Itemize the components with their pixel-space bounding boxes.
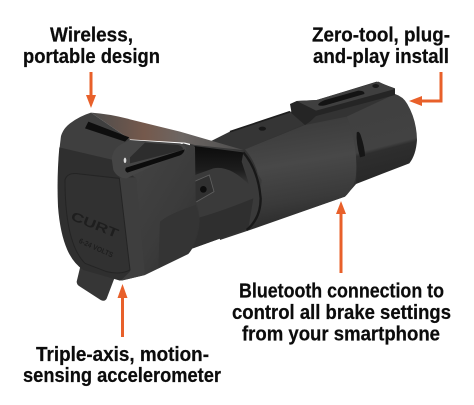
roof wedge [91,113,243,150]
hinge glint [124,158,126,163]
inner face outline [65,173,130,273]
arrow: zero-tool install [409,72,442,106]
latch tab [77,265,115,301]
label: triple-axis accelerometer: Triple-axis, motion- [36,343,209,366]
neck lower shading [190,198,253,249]
hinge slot [130,143,183,163]
label: bluetooth connection: from your smartphone [242,322,440,346]
arrow: accelerometer [118,284,128,337]
rear tube section [207,94,395,240]
neck opening [194,146,249,185]
neck body [190,140,262,249]
label: bluetooth connection: control all brake settings [232,301,451,324]
screw [259,127,266,131]
label: triple-axis accelerometer [23,343,221,387]
rail screw [372,84,379,88]
cover slot [85,122,129,142]
label: zero-tool, plug-and-play install: Zero-tool, plug- [312,24,450,46]
label: wireless, portable design: Wireless, [50,24,133,46]
embossed logo text: CURT [69,209,121,241]
sleeve edge [243,152,261,230]
label: bluetooth connection [232,280,451,346]
sleeve clip slot [248,171,257,195]
rim strip [119,177,145,281]
end cap [347,94,417,184]
arrow: wireless design [86,72,96,108]
middle sleeve [245,117,356,231]
label: zero-tool, plug-and-play install [312,24,450,68]
side housing [118,143,200,281]
side clip slot [357,132,365,157]
label: wireless, portable design: portable design [23,45,160,68]
rear top ridge [207,112,305,160]
label: triple-axis accelerometer: sensing accelerometer [23,364,221,387]
rail slot [318,91,364,106]
hinge [112,140,186,178]
product: neck section [190,140,262,249]
label: zero-tool, plug-and-play install: and-play install [313,45,449,68]
housing collar shading [158,205,198,268]
label: bluetooth connection: Bluetooth connection to [239,280,444,302]
ridge highlight [230,112,290,132]
arrow: bluetooth connection [336,201,346,273]
product: front connector [58,113,243,301]
bracket with screw [194,175,214,203]
product: tube body [207,82,417,240]
label: wireless, portable design [23,24,160,68]
cover face [58,147,142,281]
top of cover [59,113,130,172]
mounting rail [290,82,395,125]
rail top face [297,82,395,111]
embossed voltage text: 6-24 VOLTS [78,236,115,259]
